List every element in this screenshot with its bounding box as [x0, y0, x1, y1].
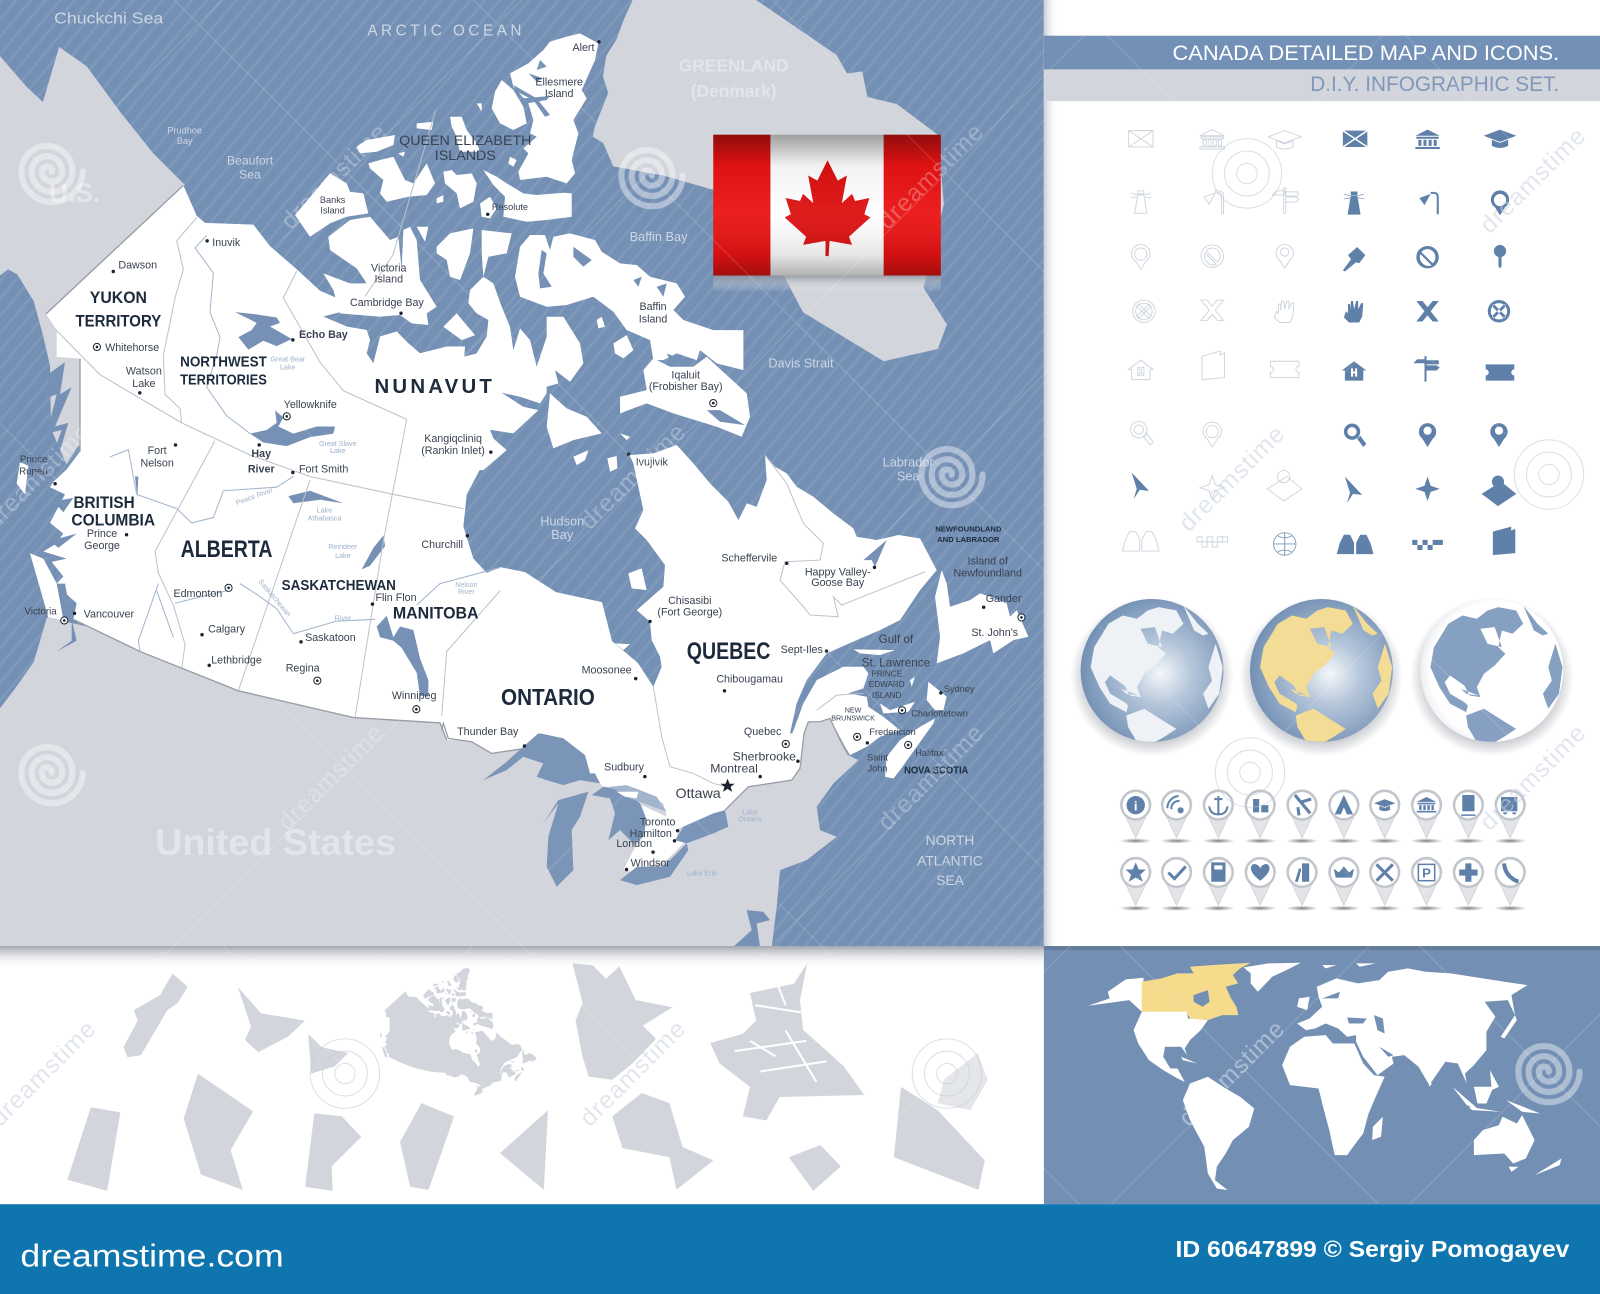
icon: no sign — [1416, 246, 1439, 268]
pin: medical cross — [1453, 857, 1484, 905]
diagonal dreamstime text: dreamstime — [1174, 1015, 1291, 1132]
image id and credit: ID 60647899 © Sergiy Pomogayev — [1176, 1236, 1569, 1262]
Canada highlighted — [1142, 963, 1251, 1023]
sea and neighbouring country labels: Hudson — [540, 514, 584, 529]
city and feature labels: Alert — [572, 42, 594, 54]
pin: airplane — [1287, 790, 1317, 838]
continent: Greenland — [1244, 963, 1301, 992]
city and feature labels: Newfoundland — [954, 568, 1022, 580]
label: British Columbia: BRITISH — [73, 494, 135, 512]
pin: info — [1120, 790, 1151, 838]
province and territory names: TERRITORY — [76, 313, 161, 331]
sea and neighbouring country labels: SEA — [936, 873, 965, 888]
top shadow — [1044, 946, 1600, 950]
strong spirals — [21, 146, 1580, 1102]
city markers — [53, 40, 1025, 871]
globe: white continents — [1070, 597, 1234, 756]
subtitle: D.I.Y. INFOGRAPHIC SET. — [1310, 72, 1559, 96]
label: Saskatchewan: SASKATCHEWAN — [282, 578, 396, 594]
continent: USA and Central America — [1134, 1012, 1208, 1082]
provincial borders: west — [56, 218, 500, 718]
icon: shower — [1419, 192, 1439, 214]
province and territory names: TERRITORIES — [180, 373, 267, 389]
label: Ontario: ONTARIO — [501, 684, 595, 710]
Lake Superior — [483, 733, 600, 785]
maple leaf — [785, 160, 870, 256]
icon: documents — [1493, 527, 1515, 555]
city and feature labels: Ottawa — [676, 786, 721, 802]
label: Nova Scotia: NOVA SCOTIA — [904, 766, 969, 777]
flag red bars — [713, 135, 941, 276]
city and feature labels: Athabasca — [308, 514, 341, 522]
label: Manitoba: MANITOBA — [393, 604, 479, 622]
dreamstime logo text: dreamstime.com — [20, 1237, 284, 1273]
sea and neighbouring country labels: Sea — [239, 168, 261, 182]
province and territory names: BRUNSWICK — [831, 714, 875, 722]
city and feature labels: Sherbrooke — [733, 749, 796, 763]
panel: right column background — [1044, 0, 1600, 946]
city and feature labels: Sept-Iles — [781, 644, 823, 656]
subtitle band — [1044, 69, 1600, 101]
city and feature labels: Charlottetown — [911, 708, 968, 718]
pin: info: i — [1134, 798, 1138, 813]
pin: heart — [1245, 857, 1276, 905]
city and feature labels: Ontario — [738, 816, 762, 824]
silhouette: Saskatchewan — [400, 1103, 454, 1190]
city and feature labels: Windsor — [631, 857, 670, 869]
city and feature labels: Saint — [867, 752, 888, 762]
city and feature labels: Fort Smith — [299, 463, 348, 475]
city and feature labels: Saskatoon — [305, 632, 356, 644]
city and feature labels: Victoria — [371, 262, 407, 274]
label: Yukon: YUKON — [90, 289, 147, 307]
city and feature labels — [19, 42, 1022, 878]
Nunavut silhouette channels — [735, 980, 827, 1082]
city and feature labels: Thunder Bay — [457, 726, 519, 738]
icon: graduation cap — [1484, 130, 1516, 148]
city and feature labels: Lethbridge — [211, 654, 262, 666]
city and feature labels: Nelson — [455, 581, 477, 589]
icon: ball pin — [1494, 245, 1506, 268]
globe: blue continents — [1410, 597, 1573, 756]
icon: gloves — [1337, 535, 1373, 554]
city and feature labels: River — [335, 614, 352, 622]
city and feature labels: Iqaluit — [671, 370, 700, 382]
city and feature labels: Regina — [286, 662, 320, 674]
city and feature labels: Edmonton — [173, 588, 222, 600]
map pin icons: bottom row — [1119, 857, 1527, 911]
icon: map with pin — [1482, 476, 1516, 506]
land: United States — [0, 617, 714, 946]
city and feature labels: River — [248, 463, 275, 475]
top shadow — [0, 946, 1044, 968]
title band — [1044, 36, 1600, 69]
city and feature labels: Winnipeg — [392, 690, 437, 702]
city and feature labels: Churchill — [421, 539, 463, 551]
city and feature labels: QUEEN ELIZABETH — [399, 133, 531, 149]
silhouette: Prince Edward Island area — [938, 1053, 988, 1110]
city and feature labels: Yellowknife — [284, 399, 337, 411]
province and territory names: COLUMBIA — [71, 512, 155, 530]
city and feature labels: Lake — [317, 506, 332, 514]
city and feature labels: London — [616, 838, 652, 850]
sea and neighbouring country labels: (Denmark) — [691, 81, 777, 101]
silhouette: Alberta — [67, 1107, 120, 1191]
diagonal dreamstime text: dreamstime — [276, 118, 393, 235]
sea and neighbouring country labels: United States — [155, 822, 396, 863]
label: Prince Edward Island: PRINCE — [871, 670, 903, 679]
flag shading — [713, 135, 941, 276]
panel: main map — [0, 0, 1044, 947]
diagonal dreamstime text: dreamstime — [1475, 719, 1592, 836]
inland lakes and inlets — [43, 60, 887, 696]
international border — [46, 185, 848, 810]
diagonal dreamstime text: dreamstime — [873, 719, 990, 836]
city and feature labels: Calgary — [208, 624, 246, 636]
icon set: light outlined icons — [1122, 130, 1302, 555]
diagonal dreamstime text: dreamstime — [575, 418, 692, 535]
city and feature labels: Flin Flon — [376, 592, 417, 604]
city and feature labels: Lake Erie — [687, 870, 717, 878]
label: Newfoundland and Labrador: NEWFOUNDLAND — [935, 525, 1002, 534]
city and feature labels: Nelson — [140, 457, 174, 469]
footer bar — [0, 1204, 1600, 1294]
pin: graduation cap — [1369, 790, 1400, 838]
city and feature labels: Moosonee — [582, 665, 632, 677]
pin: phone — [1495, 857, 1526, 905]
land: Alaska and panhandle — [0, 47, 185, 464]
province and territory names: AND LABRADOR — [937, 535, 1000, 544]
icon: location dot — [1419, 423, 1436, 447]
islands — [1181, 963, 1561, 1175]
Canadian flag — [713, 135, 941, 292]
city and feature labels: Lake — [335, 552, 351, 560]
province and territory names: ISLAND — [872, 691, 902, 700]
city and feature labels: Island — [320, 205, 345, 215]
city and feature labels: Peace River — [235, 486, 274, 507]
label: Northwest Territories: NORTHWEST — [180, 354, 267, 370]
land: Canada — [17, 33, 1028, 872]
city and feature labels: Rupert — [19, 467, 49, 478]
city and feature labels: Great Bear — [270, 355, 306, 363]
city and feature labels: Halifax — [915, 748, 944, 758]
sea and neighbouring country labels: Baffin Bay — [630, 229, 688, 244]
sea and neighbouring country labels: ARCTIC OCEAN — [367, 23, 524, 40]
silhouette: New Brunswick — [789, 1145, 841, 1191]
city and feature labels: (Rankin Inlet) — [421, 445, 485, 457]
sea and neighbouring country labels: Bay — [551, 527, 574, 542]
city and feature labels: Echo Bay — [299, 329, 348, 341]
pin: star — [1120, 857, 1151, 905]
city and feature labels: (Fort George) — [657, 606, 722, 618]
sea and neighbouring country labels: Sea — [897, 469, 920, 484]
city and feature labels: Island of — [968, 555, 1008, 567]
silhouette: Newfoundland and Labrador — [238, 987, 348, 1074]
icon: cursor arrow — [1345, 477, 1362, 503]
city and feature labels: Lake — [132, 378, 156, 390]
icon: location pin — [1490, 423, 1508, 447]
diagonal dreamstime text: dreamstime — [273, 719, 390, 836]
city and feature labels: Inuvik — [212, 237, 241, 249]
icon: taxi checks — [1412, 540, 1443, 550]
city and feature labels: Hamilton — [630, 828, 672, 840]
continent: Eurasia — [1297, 968, 1528, 1085]
diagonal dreamstime text: dreamstime — [575, 1015, 692, 1132]
Great Lakes — [483, 733, 728, 887]
city and feature labels: Happy Valley- — [805, 567, 871, 579]
city and feature labels: Scheffervile — [721, 552, 777, 564]
sea and neighbouring country labels — [49, 10, 983, 888]
pin: crown — [1329, 857, 1359, 905]
diagonal dreamstime text: dreamstime — [1475, 122, 1592, 239]
pin: calculator — [1203, 857, 1234, 905]
city and feature labels: Gander — [986, 593, 1022, 605]
footer background — [0, 1204, 1600, 1294]
city and feature labels: Hay — [251, 448, 271, 460]
Cape Cod inlet — [733, 910, 770, 947]
Manitoulin Island — [617, 792, 638, 798]
city and feature labels: Vancouver — [84, 608, 134, 620]
icon: ring pin — [1491, 190, 1509, 215]
icon: hotel house — [1342, 361, 1366, 381]
pin: anchor — [1203, 790, 1234, 838]
sea and neighbouring country labels: NORTH — [926, 833, 974, 848]
label: Nunavut: NUNAVUT — [374, 376, 492, 398]
flag white field — [770, 135, 884, 276]
continent: Australia — [1474, 1115, 1535, 1163]
globes — [1070, 597, 1573, 756]
icon: cursor arrow left — [1132, 472, 1149, 499]
icon set: solid icons — [1132, 130, 1516, 555]
label: Quebec: QUEBEC — [687, 638, 771, 665]
ocean — [1044, 946, 1600, 1204]
city and feature labels: Gulf of — [879, 633, 914, 646]
ocean background — [0, 0, 1044, 946]
icon: compass — [1415, 477, 1440, 501]
diagonal dreamstime text — [0, 118, 1592, 1132]
icon: signpost — [1413, 356, 1440, 382]
sea and neighbouring country labels: Chuckchi Sea — [54, 10, 164, 27]
city and feature labels: Toronto — [640, 817, 676, 829]
icon: hand — [1344, 301, 1363, 322]
silhouette: Northwest Territories — [894, 1087, 985, 1190]
city and feature labels: Montreal — [710, 762, 758, 776]
sea and neighbouring country labels: ATLANTIC — [917, 853, 983, 868]
city and feature labels: Prince — [87, 528, 117, 540]
Lake Erie — [620, 843, 688, 885]
city and feature labels: St. Lawrence — [862, 656, 930, 669]
silhouette: Ontario — [612, 1093, 713, 1190]
icon: magnifier — [1344, 424, 1366, 447]
city and feature labels: Ivujivik — [636, 456, 668, 468]
flag drop shadow — [713, 276, 941, 292]
silhouette: Canada — [380, 968, 537, 1095]
Black Sea, Caspian Sea and Baltic — [1322, 992, 1394, 1057]
provincial borders: east and Arctic — [365, 110, 925, 787]
icon: circled cross — [1488, 300, 1510, 322]
land: northeastern United States — [600, 718, 858, 947]
pin: bus — [1495, 790, 1526, 838]
icon: thumbtack — [1343, 247, 1365, 271]
city and feature labels: Chibougamau — [716, 674, 783, 686]
diagonal dreamstime text: dreamstime — [1174, 420, 1291, 537]
sea and neighbouring country labels: GREENLAND — [679, 55, 789, 75]
pin: wifi — [1161, 790, 1192, 838]
pin: parking: P — [1422, 866, 1431, 881]
city and feature labels: Ellesmere — [535, 77, 583, 89]
city and feature labels: Banks — [320, 195, 346, 205]
silhouette: Yukon — [500, 1110, 548, 1190]
continent: Africa — [1282, 1035, 1385, 1155]
icon: lighthouse — [1344, 192, 1364, 214]
city and feature labels: Kangiqcliniq — [424, 433, 482, 445]
Lake Huron — [592, 787, 647, 843]
sea and neighbouring country labels: Bay — [177, 136, 193, 146]
icon: envelope — [1343, 131, 1367, 147]
city and feature labels: Cambridge Bay — [350, 297, 424, 309]
city and feature labels: Island — [639, 313, 667, 325]
city and feature labels: Goose Bay — [811, 577, 865, 589]
silhouette: Manitoba — [305, 1113, 361, 1191]
pin: check — [1161, 857, 1192, 905]
city and feature labels: Quebec — [744, 726, 782, 738]
label: New Brunswick: NEW — [845, 706, 862, 714]
city and feature labels: Sydney — [944, 684, 975, 694]
city and feature labels: George — [84, 540, 120, 552]
continent: Alaska — [1088, 978, 1144, 1012]
city and feature labels: Whitehorse — [105, 342, 159, 354]
city and feature labels: (Frobisher Bay) — [649, 381, 723, 393]
city and feature labels: Watson — [126, 366, 162, 378]
city and feature labels: Baffin — [639, 301, 667, 313]
panel: world map — [1044, 946, 1600, 1204]
city and feature labels: Island — [545, 88, 574, 100]
city and feature labels: ISLANDS — [435, 148, 496, 164]
label: Alberta: ALBERTA — [181, 536, 273, 563]
column edge shadow — [1044, 0, 1058, 946]
pin: fuel — [1287, 857, 1317, 905]
land: Greenland — [593, 0, 947, 361]
pin: parking — [1411, 857, 1442, 905]
faint spirals on white panels — [310, 139, 1584, 1108]
sea and neighbouring country labels: Beaufort — [227, 153, 274, 167]
city and feature labels: Victoria — [24, 606, 57, 617]
icon: ticket — [1486, 364, 1514, 381]
city and feature labels: Fredericton — [869, 727, 916, 737]
city and feature labels: Fort — [148, 445, 167, 457]
icon: cross — [1416, 301, 1439, 321]
city and feature labels: Lake — [330, 447, 346, 455]
Georgian Bay — [610, 785, 667, 812]
pin: tools — [1369, 857, 1400, 905]
pin: train — [1453, 790, 1484, 838]
city and feature labels: Prince — [20, 454, 47, 465]
map pin icons: top row — [1119, 790, 1527, 843]
globe: yellow continents — [1240, 597, 1403, 756]
city and feature labels: Lake — [742, 808, 758, 816]
city and feature labels: John — [868, 764, 887, 774]
silhouette: Nova Scotia — [123, 974, 188, 1057]
Hudson Bay — [1194, 990, 1210, 1007]
sea and neighbouring country labels: Labrador — [883, 454, 934, 469]
sea and neighbouring country labels: Prudhoe — [167, 126, 202, 136]
icon: bank — [1415, 130, 1440, 149]
sea and neighbouring country labels: Davis Strait — [768, 355, 834, 370]
city and feature labels: Reindeer — [328, 543, 358, 551]
panel background — [0, 946, 1044, 1204]
silhouette: British Columbia — [184, 1074, 253, 1190]
pin: bank — [1411, 790, 1442, 838]
pin: food — [1245, 790, 1276, 838]
silhouette: Quebec — [572, 963, 672, 1080]
city and feature labels: Island — [374, 274, 403, 286]
city and feature labels: Dawson — [118, 259, 157, 271]
title banner — [1044, 36, 1600, 101]
title: CANADA DETAILED MAP AND ICONS. — [1172, 41, 1559, 65]
silhouette: Nunavut — [710, 963, 864, 1121]
city and feature labels: Sudbury — [604, 761, 645, 773]
rivers — [110, 235, 500, 651]
panel: province silhouettes — [0, 946, 1044, 1204]
province and territory names: EDWARD — [869, 680, 905, 689]
sea and neighbouring country labels: U.S. — [49, 178, 101, 208]
Lake Ontario — [675, 810, 728, 843]
city and feature labels: Resolute — [492, 202, 528, 212]
diagonal dreamstime text: dreamstime — [873, 118, 990, 235]
city and feature labels: River — [458, 588, 475, 596]
city and feature labels: Chisasibi — [668, 595, 712, 607]
continent: South America — [1183, 1077, 1254, 1190]
city and feature labels: St. John's — [971, 627, 1018, 639]
city and feature labels: Saskatchewan — [257, 578, 293, 619]
city and feature labels: Great Slave — [319, 440, 357, 448]
city and feature labels: Lake — [280, 363, 296, 371]
pin: tent — [1329, 790, 1359, 838]
Lake Michigan — [543, 792, 588, 887]
province and territory names — [71, 289, 1002, 777]
